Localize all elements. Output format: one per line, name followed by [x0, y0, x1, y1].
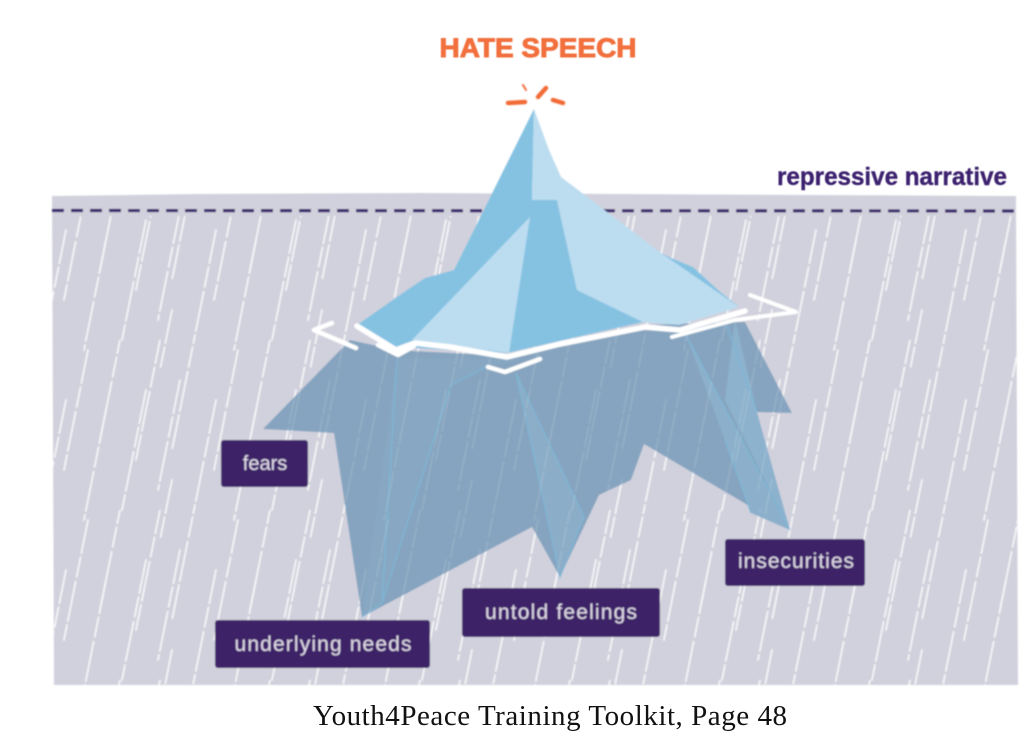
caption: source: Youth4Peace Training Toolkit, Page 48	[313, 700, 787, 732]
waterline: white jagged outline	[314, 295, 796, 372]
title: hate speech: HATE SPEECH	[440, 33, 636, 63]
label: underlying needs: underlying needs	[234, 633, 412, 656]
label: fears: fears	[243, 453, 287, 475]
label: insecurities: insecurities	[738, 550, 854, 573]
label: untold feelings	[462, 588, 660, 637]
iceberg: underwater part	[263, 320, 792, 617]
iceberg: tip above water	[357, 109, 739, 353]
label: insecurities	[725, 539, 865, 586]
label: fears	[221, 440, 308, 487]
heading: repressive narrative: repressive narrative	[777, 163, 1007, 191]
sea background with rain streaks	[52, 193, 1018, 685]
iceberg	[263, 109, 796, 617]
label: underlying needs	[215, 620, 430, 668]
icon: orange burst above peak	[508, 85, 563, 103]
repressive narrative dashed line	[52, 209, 1016, 213]
label: untold feelings: untold feelings	[485, 601, 637, 624]
